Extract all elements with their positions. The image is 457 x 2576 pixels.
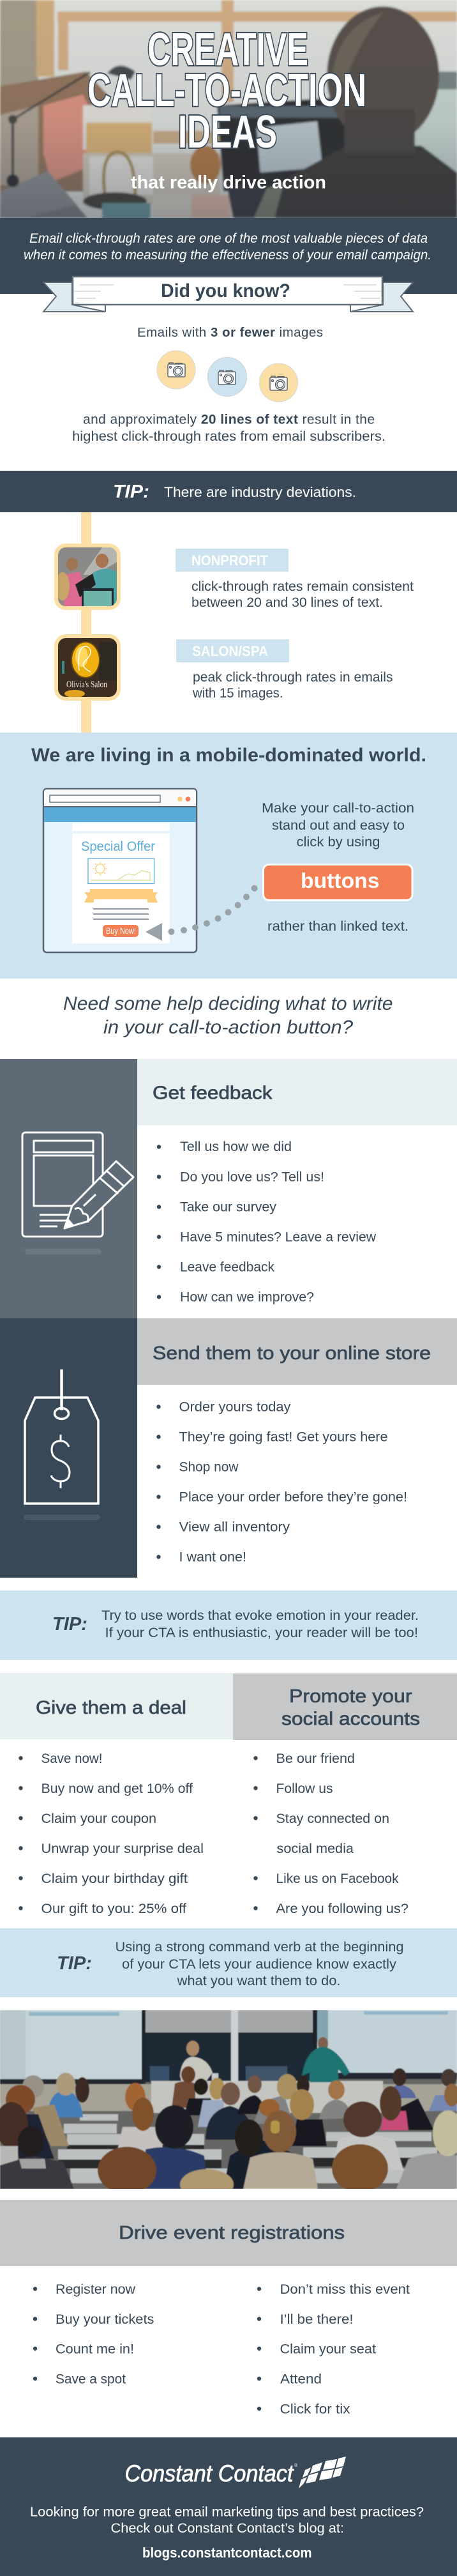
list: feedback: Have 5 minutes? Leave a review [180,1230,377,1244]
intro band: Email click-through rates are one of the most valuable pieces of data [29,231,428,246]
tip band: command verb: TIP: [57,1953,92,1974]
panel: get feedback [0,1059,457,1318]
tip band: evoke emotion: TIP: [52,1614,87,1635]
list: deal: Unwrap your surprise deal [41,1841,204,1856]
timeline stem [81,512,91,734]
panel: give them a deal [0,1673,233,1916]
list: event right: Attend [280,2372,322,2386]
question heading: Need some help deciding what to write [63,993,393,1014]
text: make your call-to-action [262,801,414,850]
text: footer call to action: Looking for more great email marketing tips and best practices? [30,2505,424,2519]
list: event left: Count me in! [56,2342,134,2357]
text: 20 lines of text: highest click-through rates from email subscribers. [72,429,386,444]
subtitle: that really drive action [131,172,326,193]
list: deal: Claim your birthday gift [41,1871,188,1886]
list: deal: Claim your coupon [41,1811,156,1826]
label: salon/spa: peak click-through rates in emails [193,670,393,685]
tip band: command verb: what you want them to do. [176,1974,341,1988]
photo: seminar audience [0,2010,457,2200]
list: event left [33,2282,154,2386]
photo: salon [54,634,121,701]
panel: mobile-dominated world [0,733,457,979]
browser illustration [43,789,197,952]
list: event left: Register now [56,2282,136,2297]
label: nonprofit: click-through rates remain consistent [191,579,414,594]
list: deal: Save now! [41,1751,102,1766]
text: footer call to action: Check out Constant Contact’s blog at: [111,2521,344,2536]
list: deal: Our gift to you: 25% off [41,1902,186,1916]
label: salon/spa: with 15 images. [192,686,283,701]
tip band: command verb [0,1928,457,1997]
question heading [63,993,393,1038]
title [87,24,366,158]
list: social: Follow us [276,1781,333,1796]
list: social [253,1751,408,1916]
list: social: Like us on Facebook [276,1871,399,1886]
list: store: I want one! [179,1550,246,1565]
list: event right: Claim your seat [280,2342,376,2357]
list: social: social media [277,1841,354,1856]
tip band: evoke emotion: Try to use words that evoke emotion in your reader. [101,1608,419,1623]
icon: price tag [25,1369,98,1504]
title: CREATIVE [147,24,308,75]
list: deal: Buy now and get 10% off [41,1781,193,1796]
button: buttons [301,869,379,892]
list: event right: Don’t miss this event [280,2282,410,2297]
label: nonprofit [176,549,414,610]
list: event left: Save a spot [56,2372,126,2386]
intro band [0,218,457,294]
logo: Constant Contact: ® [294,2463,298,2468]
panel: drive event registrations [0,2200,457,2417]
text: emails with 3 or fewer images: Emails with 3 or fewer images [137,325,323,340]
list: feedback: Take our survey [180,1200,277,1215]
browser illustration: Buy Now! [106,926,136,936]
label: nonprofit: NONPROFIT [191,553,269,568]
text: footer call to action: blogs.constantcontact.com [142,2545,311,2561]
panel: promote your social accounts [233,1673,457,1916]
banner: did you know: Did you know? [161,280,290,301]
list: event right: I’ll be there! [280,2312,354,2327]
list: event right: Click for tix [280,2402,350,2417]
text: 20 lines of text: and approximately 20 lines of text result in the [83,413,375,427]
button [263,865,412,901]
tip band: command verb: Using a strong command verb at the beginning [115,1940,403,1955]
list: social: Stay connected on [276,1811,389,1826]
panel: give them a deal: Give them a deal [36,1698,186,1718]
list: feedback: Tell us how we did [180,1139,292,1154]
banner: did you know [43,277,413,312]
tip band: evoke emotion [0,1590,457,1660]
hero photo: person at desk with laptop [0,0,457,218]
logo: Constant Contact [125,2457,346,2488]
text: footer call to action [30,2505,424,2561]
icon: camera circles [157,351,297,402]
list: store: Place your order before they’re gone! [179,1490,407,1505]
list: store: View all inventory [179,1520,290,1534]
list: store: Shop now [179,1460,239,1474]
panel: drive event registrations: Drive event registrations [119,2223,345,2243]
text: make your call-to-action: Make your call-to-action [262,801,414,816]
browser illustration: Special Offer [81,839,155,854]
list: social: Be our friend [276,1751,355,1766]
logo: Constant Contact: Constant Contact [125,2460,294,2487]
text: 20 lines of text [72,413,386,444]
label: salon/spa: SALON/SPA [192,643,268,659]
list: event left: Buy your tickets [56,2312,154,2327]
list: feedback: Leave feedback [180,1260,274,1275]
label: nonprofit: between 20 and 30 lines of text. [191,595,383,610]
photo: nonprofit [54,544,121,610]
panel: promote your social accounts: social accounts [281,1709,420,1730]
arrow: dotted pointer to button [146,885,258,941]
footer [0,2437,457,2576]
tip bar: industry deviations: There are industry deviations. [164,484,356,500]
tip bar: industry deviations: TIP: [113,482,149,502]
icon: form and pencil [22,1132,133,1237]
text: make your call-to-action: stand out and easy to [272,818,405,833]
tip band: evoke emotion: If your CTA is enthusiastic, your reader will be too! [105,1626,418,1640]
title: IDEAS [178,107,277,158]
label: salon/spa [176,639,393,701]
question heading: in your call-to-action button? [103,1017,354,1038]
list: store: Order yours today [179,1400,291,1414]
list: feedback: Do you love us? Tell us! [180,1170,324,1184]
text: make your call-to-action: click by using [296,835,380,850]
list: feedback: How can we improve? [180,1290,314,1304]
list: feedback [157,1139,377,1304]
tip band: command verb: of your CTA lets your audience know exactly [122,1957,397,1972]
list: social: Are you following us? [276,1902,408,1916]
panel: promote your social accounts: Promote your [289,1686,412,1707]
photo: salon: Olivia's Salon [66,680,107,690]
heading: mobile: We are living in a mobile-dominated world. [31,745,426,766]
list: deal [19,1751,204,1916]
panel: online store [0,1318,457,1578]
list: store [156,1400,407,1565]
list: store: They’re going fast! Get yours here [179,1429,388,1445]
text: rather than linked text: rather than linked text. [267,919,408,934]
list: event right [257,2282,410,2417]
heading: store: Send them to your online store [153,1343,431,1364]
intro band: when it comes to measuring the effectiveness of your email campaign. [24,248,431,263]
heading: get feedback: Get feedback [153,1083,273,1104]
tip bar: industry deviations [0,471,457,512]
